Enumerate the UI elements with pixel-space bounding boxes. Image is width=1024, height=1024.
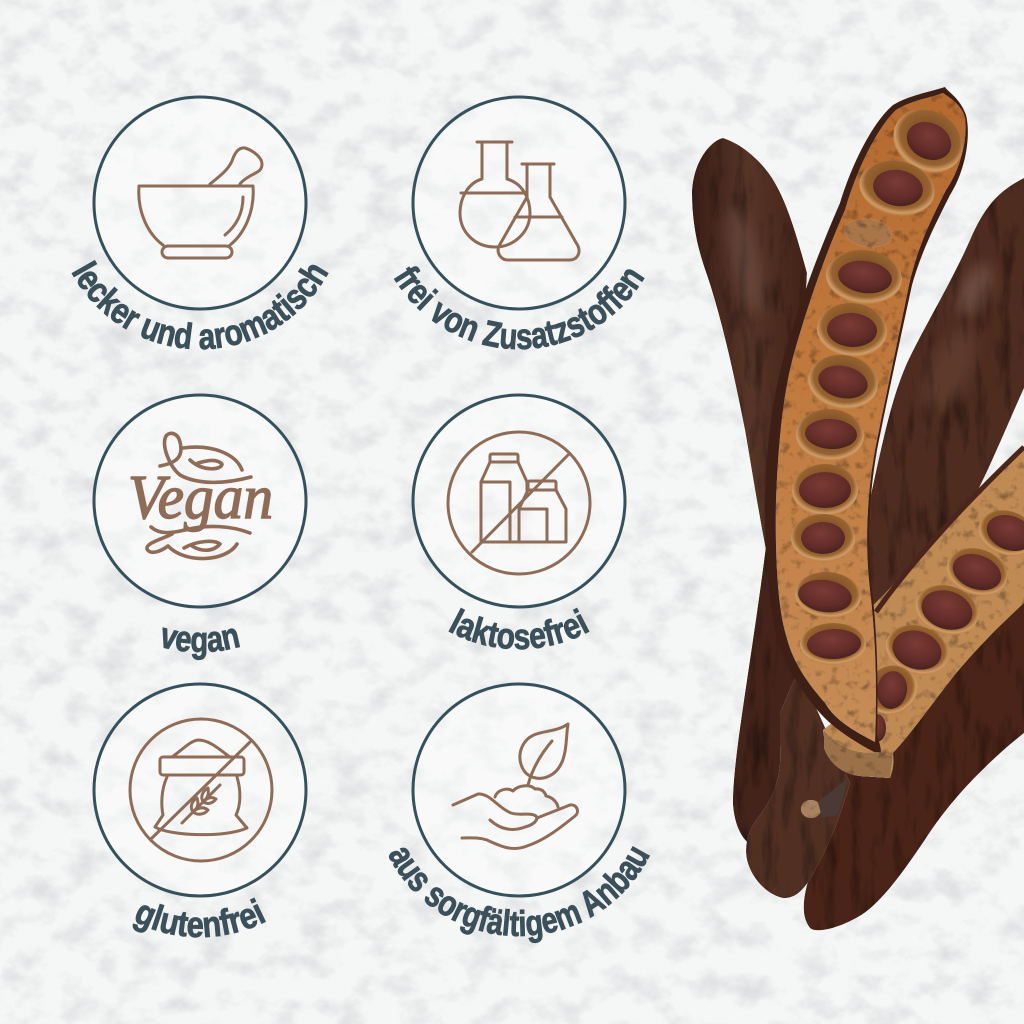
highlight — [913, 321, 987, 419]
icon: mortar and pestle — [139, 148, 262, 258]
highlight — [950, 259, 1000, 321]
label: aus sorgfältigem Anbau: aus sorgfältigem Anbau — [388, 846, 650, 944]
panel: glutenfrei — [92, 682, 308, 938]
panel: lecker und aromatisch — [72, 96, 329, 350]
icon: laboratory flasks — [460, 142, 579, 260]
pod: centre open with seeds — [765, 87, 974, 755]
pod: left closed back — [692, 138, 807, 560]
icon: crossed-out milk cartons — [448, 432, 590, 574]
empty cavity — [842, 216, 894, 250]
pod: right open with seeds — [823, 447, 1024, 778]
panel: vegan — [92, 394, 308, 660]
circle outline — [94, 395, 306, 607]
circle outline — [413, 97, 625, 309]
highlight — [718, 203, 772, 317]
stem nub — [801, 800, 821, 818]
circle outline — [94, 97, 306, 309]
label: laktosefrei: laktosefrei — [448, 608, 590, 650]
icon: vegan lettering with leaves: Vegan — [128, 464, 273, 532]
label: vegan: vegan — [162, 627, 240, 660]
carob pods photo illustration — [692, 87, 1024, 930]
pod: front curled dark — [746, 672, 850, 898]
pod: lower dark back — [733, 530, 810, 850]
pod: large bottom dark — [804, 590, 1024, 930]
seeds — [796, 115, 957, 660]
label: glutenfrei: glutenfrei — [132, 898, 266, 938]
panel: frei von Zusatzstoffen — [394, 96, 645, 350]
icon: hand holding seedling — [453, 724, 577, 848]
label: lecker und aromatisch: lecker und aromatisch — [72, 260, 329, 350]
panel: aus sorgfältigem Anbau — [388, 682, 650, 944]
circle outline — [413, 684, 625, 896]
circle outline — [413, 395, 625, 607]
icon: vegan lettering with leaves — [128, 433, 273, 559]
label: frei von Zusatzstoffen: frei von Zusatzstoffen — [394, 266, 645, 350]
circle outline — [94, 684, 306, 896]
icon: crossed-out flour sack with wheat — [130, 719, 272, 861]
panel: laktosefrei — [412, 394, 626, 650]
seed cavities — [791, 97, 974, 665]
pod stem tip — [824, 730, 893, 778]
pod: right closed back — [855, 178, 1024, 640]
